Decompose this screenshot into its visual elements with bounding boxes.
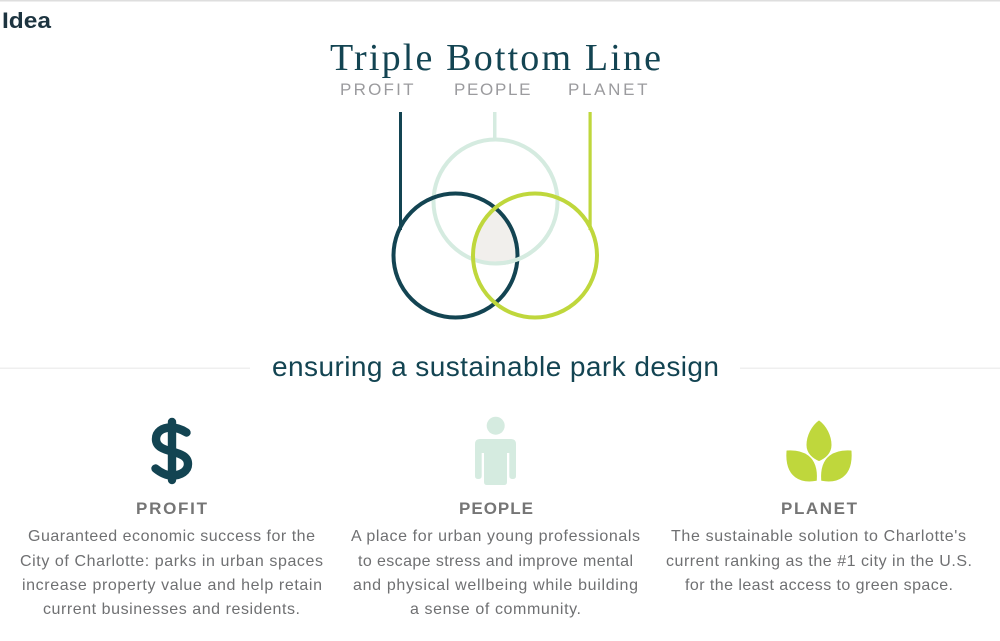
tagline: ensuring a sustainable park design: [272, 351, 719, 382]
panel: profit: Guaranteed economic success for the: [28, 528, 315, 545]
panel: profit: PROFIT: [136, 499, 208, 518]
icon: dollar: [156, 422, 188, 480]
icon: leaves: [787, 421, 851, 481]
panel: people: and physical wellbeing while building: [353, 577, 638, 594]
panel: planet: [666, 499, 972, 594]
subtitle labels: PROFIT: [340, 80, 414, 99]
icon: person: [475, 417, 516, 485]
panel: people: to escape stress and improve mental: [358, 553, 633, 570]
panel: planet: PLANET: [781, 499, 858, 518]
panel: people: PEOPLE: [459, 499, 533, 518]
title: Triple Bottom Line: [330, 37, 661, 79]
panel: planet: current ranking as the #1 city in the U.S.: [666, 553, 972, 570]
panel: profit: increase property value and help retain: [22, 577, 322, 594]
panel: people: [351, 499, 640, 618]
panel: people: A place for urban young professionals: [351, 528, 640, 545]
panel: planet: for the least access to green space.: [685, 577, 953, 594]
panel: profit: City of Charlotte: parks in urban spaces: [20, 553, 323, 570]
subtitle labels: [340, 80, 648, 99]
venn diagram: [394, 112, 597, 318]
panel: people: a sense of community.: [410, 601, 581, 618]
subtitle labels: PLANET: [568, 80, 648, 99]
panel: profit: current businesses and residents.: [43, 601, 300, 618]
panel: profit: [20, 499, 323, 618]
heading: Idea: Idea: [2, 8, 52, 33]
panel: planet: The sustainable solution to Charlotte's: [671, 528, 966, 545]
subtitle labels: PEOPLE: [454, 80, 530, 99]
